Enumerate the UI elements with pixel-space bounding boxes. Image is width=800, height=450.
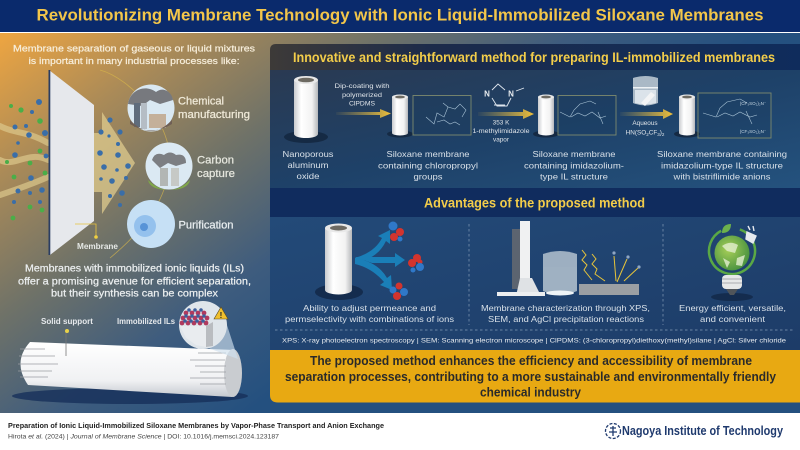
blue particles	[12, 99, 131, 207]
structure box	[698, 93, 771, 138]
step 1: nanoporous aluminum oxide: Nanoporous	[282, 149, 334, 159]
label: manufacturing	[178, 109, 250, 121]
icon: 1-methylimidazole structure	[484, 84, 524, 106]
application: purification	[127, 200, 234, 248]
caption: Energy efficient, versatile,	[679, 303, 786, 313]
structure box	[413, 96, 471, 135]
step 4: bistriflimide membrane: Siloxane membrane containing	[657, 149, 787, 159]
icon: 1-methylimidazole structure: N	[484, 90, 490, 98]
arrow: anion exchange	[620, 109, 673, 137]
arrow: dip-coating: polymerized	[342, 92, 383, 99]
step 1: nanoporous aluminum oxide	[282, 76, 334, 181]
step 2: chloropropyl siloxane membrane: containing chloropropyl	[378, 160, 478, 170]
abbreviations note: XPS: X-ray photoelectron spectroscopy | SEM: Scanning electron microscope | ClPDMS: (3-chloropropyl)diethoxy(methyl)silane | AgCl: Silver chloride	[282, 338, 786, 344]
icon: scanning electron microscope	[497, 221, 545, 296]
membrane separation diagram	[0, 70, 135, 255]
arrow: vapor transport	[472, 109, 534, 144]
arrow: dip-coating: ClPDMS	[349, 100, 375, 108]
shadow	[12, 388, 248, 404]
icon: 1-methylimidazole structure: N	[508, 90, 514, 98]
caption: permselectivity with combinations of ions	[285, 314, 454, 324]
step 1: nanoporous aluminum oxide: aluminum	[288, 160, 328, 170]
filtered flow arrow	[94, 112, 135, 214]
icon: beaker with aqueous acid	[633, 76, 658, 106]
arrow: anion exchange: CF	[649, 130, 657, 136]
arrow: anion exchange: 2	[662, 132, 665, 137]
structure box	[558, 96, 616, 135]
step 2: chloropropyl siloxane membrane: Siloxane membrane	[386, 149, 470, 159]
step 3: imidazolium siloxane membrane: containing imidazolium-	[524, 160, 624, 170]
icon: XPS surface	[579, 250, 641, 295]
arrow: dip-coating	[334, 83, 391, 118]
membrane label: Membrane	[77, 242, 119, 251]
section heading: Advantages of the proposed method	[424, 196, 645, 210]
inset circle	[179, 301, 227, 349]
conclusion callout: The proposed method enhances the efficiency and accessibility of membrane	[310, 354, 752, 368]
step 3: imidazolium siloxane membrane: type IL structure	[540, 172, 608, 182]
branching arrows	[355, 230, 405, 290]
label: Purification	[178, 220, 234, 232]
step 4: bistriflimide membrane	[657, 93, 787, 182]
panel: preparation method	[270, 44, 800, 188]
citation title: Preparation of Ionic Liquid-Immobilized Siloxane Membranes by Vapor-Phase Transport and Anion Exchange	[8, 421, 384, 430]
arrow: vapor transport: 1-methylimidazole	[472, 128, 530, 135]
arrow: anion exchange: 2	[646, 132, 649, 137]
label: Chemical	[178, 96, 224, 108]
arrow: vapor transport: 353 K	[493, 120, 510, 126]
icon: institute emblem	[606, 424, 620, 438]
step 1: nanoporous aluminum oxide: oxide	[296, 171, 320, 181]
icon: warning triangle: !	[220, 311, 222, 320]
arrow: vapor transport: vapor	[493, 136, 510, 144]
left text: immobilized ionic liquids: offer a promising avenue for efficient separation,	[18, 276, 251, 288]
icon: beaker	[543, 251, 577, 296]
advantage 1: tunable ions	[285, 222, 454, 324]
step 2: chloropropyl siloxane membrane: groups	[414, 172, 442, 182]
panel: advantages	[270, 188, 800, 350]
advantage 2: characterization	[481, 221, 650, 324]
conclusion callout: separation processes, contributing to a more sustainable and environmentally friendly	[285, 370, 776, 384]
ion clusters	[388, 222, 424, 300]
left text: immobilized ionic liquids	[18, 264, 251, 300]
tube body	[20, 342, 241, 397]
title: Revolutionizing Membrane Technology with Ionic Liquid-Immobilized Siloxane Membranes	[36, 6, 764, 24]
structure box: (CF₃SO₂)₂N⁻	[740, 129, 767, 134]
hollow fibre membrane illustration	[12, 301, 248, 404]
structure box: (CF₃SO₂)₂N⁻	[740, 101, 767, 106]
membrane sheet	[49, 70, 94, 255]
application: chemical manufacturing	[128, 84, 250, 132]
caption: SEM, and AgCl precipitation reactions	[488, 314, 644, 324]
footer	[0, 413, 800, 450]
step 4: bistriflimide membrane: with bistriflimide anions	[672, 172, 770, 182]
membrane leader	[75, 224, 96, 237]
application: carbon capture	[146, 142, 235, 190]
feed streams	[0, 126, 48, 195]
citation details: Hirota et al. (2024) | Journal of Membrane Science | DOI: 10.1016/j.memsci.2024.123187	[8, 434, 279, 440]
left text: immobilized ionic liquids: but their synthesis can be complex	[51, 288, 218, 300]
left intro text: Membrane separation of gaseous or liquid mixtures	[13, 44, 255, 54]
arrow: anion exchange: )	[660, 130, 662, 136]
left intro text	[13, 44, 255, 67]
green particles	[5, 104, 47, 220]
label: capture	[197, 168, 235, 180]
magnifier beam	[208, 316, 238, 359]
caption: Membrane characterization through XPS,	[481, 303, 650, 313]
left intro text: is important in many industrial processes like:	[28, 56, 239, 67]
left text: immobilized ionic liquids: Membranes with immobilized ionic liquids (ILs)	[25, 264, 244, 274]
conclusion callout: chemical industry	[480, 386, 581, 400]
advantage 3: energy efficient bulb	[679, 222, 786, 324]
section heading: Innovative and straightforward method for preparing IL-immobilized membranes	[293, 50, 775, 65]
connector between applications	[100, 70, 170, 258]
conclusion callout	[270, 350, 800, 402]
immobilized ILs label: Immobilized ILs	[117, 317, 176, 326]
caption: Ability to adjust permeance and	[303, 303, 436, 313]
arrow: anion exchange: HN(SO	[626, 130, 646, 136]
step 3: imidazolium siloxane membrane: Siloxane membrane	[532, 149, 616, 159]
arrow: dip-coating: Dip-coating with	[334, 83, 390, 90]
solid support label: Solid support	[41, 317, 93, 326]
step 2: chloropropyl siloxane membrane	[378, 94, 478, 182]
step 4: bistriflimide membrane: imidazolium-type IL structure	[661, 160, 783, 170]
icon: warning triangle	[214, 307, 228, 320]
arrow: anion exchange: Aqueous	[632, 120, 658, 127]
header banner	[0, 0, 800, 32]
label: Carbon	[197, 154, 234, 166]
arrow: anion exchange: 3	[657, 132, 660, 137]
step 3: imidazolium siloxane membrane	[524, 94, 624, 182]
caption: and convenient	[700, 314, 766, 324]
